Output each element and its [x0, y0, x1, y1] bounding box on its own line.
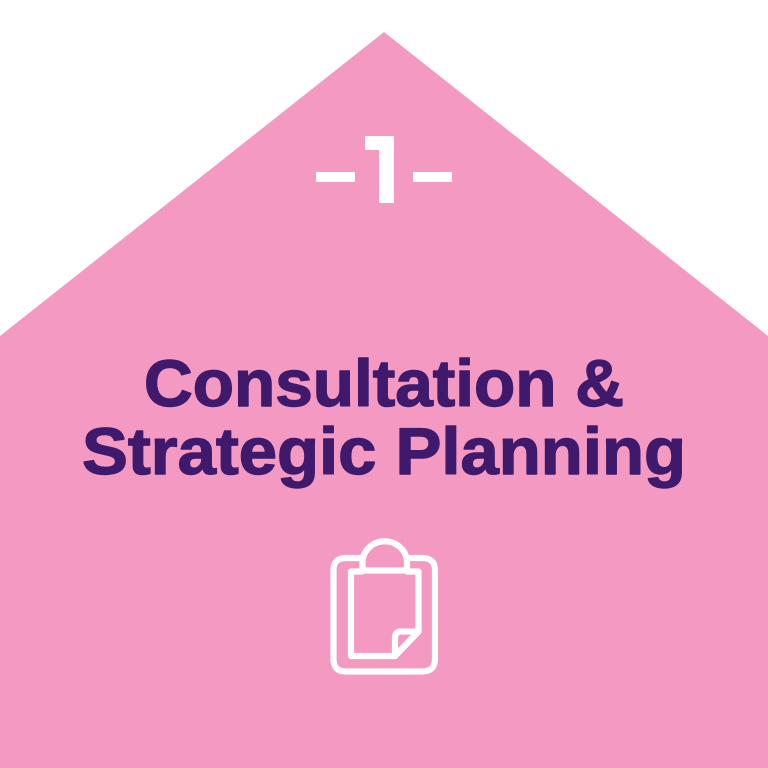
step number: dash, 1, dash — [316, 136, 452, 203]
icon: clipboard — [334, 541, 435, 672]
title: Strategic Planning — [82, 414, 686, 488]
title: Consultation & — [144, 346, 624, 420]
title — [82, 346, 686, 488]
step number: dash, 1, dash: 1 — [358, 114, 412, 224]
